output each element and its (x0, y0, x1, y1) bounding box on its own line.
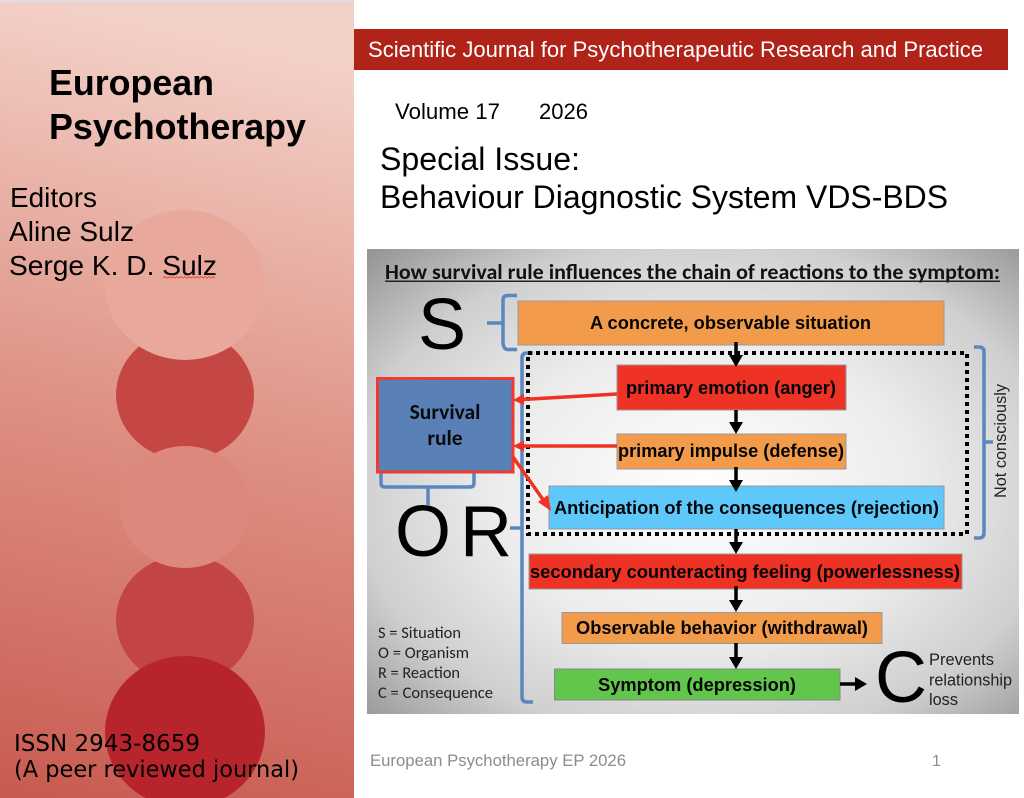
letters OR (395, 492, 512, 572)
letters OR: R (460, 492, 512, 572)
label: not consciously: Not consciously (992, 383, 1010, 498)
ISSN note (14, 731, 299, 783)
ISSN note: (A peer reviewed journal) (14, 757, 299, 783)
panel: left cover column (0, 2, 354, 798)
editors: Aline Sulz (9, 216, 134, 247)
box: symptom: Symptom (depression) (598, 675, 796, 695)
panel: SORC diagram (367, 249, 1019, 718)
editors: Editors (10, 182, 97, 213)
box: primary emotion: primary emotion (anger) (626, 378, 836, 398)
box: concrete situation: A concrete, observable situation (590, 313, 871, 333)
box: symptom (554, 669, 840, 700)
brace: reaction (510, 353, 533, 702)
box: concrete situation (518, 301, 944, 345)
box: anticipation: Anticipation of the consequences (rejection) (554, 498, 939, 518)
box: survival rule: Survival (410, 399, 480, 425)
header bar: Scientific Journal for Psychotherapeutic Research and Practice (368, 37, 983, 62)
legend (378, 624, 493, 703)
box: survival rule: rule (427, 425, 463, 451)
ISSN note: ISSN 2943-8659 (14, 731, 200, 757)
consequence note: Prevents (929, 651, 994, 669)
editors (9, 182, 217, 281)
header bar (354, 29, 1008, 70)
letter S: S (418, 285, 466, 365)
brace: organism (381, 472, 474, 505)
journal title: European (49, 63, 214, 103)
volume and year: 2026 (539, 99, 588, 124)
dotted frame: not conscious zone (528, 353, 967, 534)
brace: situation (487, 296, 517, 350)
box: anticipation (549, 486, 944, 529)
legend: C = Consequence (378, 684, 493, 703)
legend: S = Situation (378, 624, 461, 643)
journal title: Psychotherapy (49, 107, 306, 147)
box: observable behavior (562, 612, 882, 644)
box: survival rule (378, 378, 513, 472)
consequence note: loss (929, 691, 958, 709)
box: primary impulse: primary impulse (defense) (618, 441, 844, 461)
diagram title: How survival rule influences the chain of reactions to the symptom: (385, 259, 1000, 285)
special issue heading: Special Issue: (380, 141, 580, 177)
journal title (49, 63, 306, 147)
volume and year (395, 99, 588, 124)
arrows: black chain (729, 342, 867, 691)
special issue heading: Behaviour Diagnostic System VDS-BDS (380, 179, 948, 215)
consequence note (929, 651, 1012, 709)
box: observable behavior: Observable behavior (withdrawal) (576, 618, 868, 638)
letter C: C (875, 638, 927, 718)
footer: page number: 1 (932, 753, 941, 770)
box: primary impulse (617, 434, 846, 469)
brace: not consciously (974, 347, 993, 538)
box: secondary feeling (529, 554, 962, 589)
decorative circle column (105, 210, 265, 798)
box: secondary feeling: secondary counteracting feeling (powerlessness) (530, 562, 960, 582)
legend: O = Organism (378, 644, 469, 663)
footer: journal name: European Psychotherapy EP 2026 (370, 752, 626, 770)
arrows: red feedback (513, 394, 617, 511)
special issue heading (380, 141, 948, 215)
volume and year: Volume 17 (395, 99, 500, 124)
box: primary emotion (617, 365, 846, 410)
legend: R = Reaction (378, 664, 460, 683)
letters OR: O (395, 492, 451, 572)
editors: Serge K. D. Sulz (9, 250, 217, 281)
consequence note: relationship (929, 672, 1012, 690)
